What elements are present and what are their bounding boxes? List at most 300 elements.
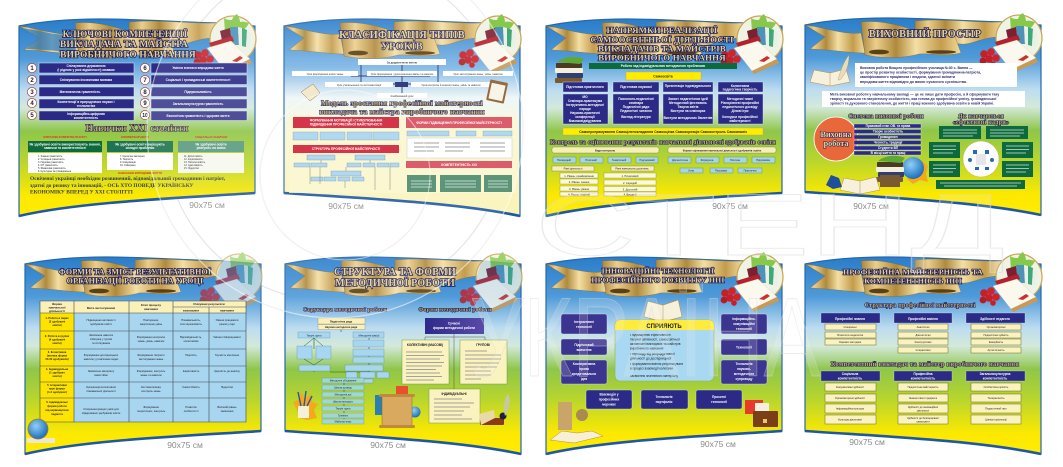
control diagram: Рівні діяльності xyxy=(564,167,583,171)
skills columns: КЛЮЧОВІ КОМПЕТЕНТНОСТІ xyxy=(43,135,87,139)
bottom boxes: мережах xyxy=(602,402,616,406)
table: 20-30 здобувачів) xyxy=(45,357,69,361)
skills columns: навички та компетентності xyxy=(44,146,86,150)
control diagram: Письмова xyxy=(715,168,728,172)
skills columns: 13. Наполегливість xyxy=(184,161,206,164)
table: Відповідальність, xyxy=(180,335,202,339)
table: педагога xyxy=(51,413,63,416)
icon: scroll with school items xyxy=(375,386,420,428)
competency list: Екологічна грамотність і здорове життя xyxy=(167,114,230,118)
left boxes xyxy=(561,314,607,384)
title: НАПРЯМКИ РЕАЛІЗАЦІЇ xyxy=(607,25,718,35)
lower columns: Педагогічний такт xyxy=(985,406,1008,410)
control diagram: Поточний xyxy=(585,158,597,162)
flow chart xyxy=(292,59,513,98)
subheading right: Як навчаються xyxy=(958,114,1004,120)
panel 5: forms of lesson organisation xyxy=(25,252,262,454)
green text boxes xyxy=(929,126,1033,189)
table: Етап процесу xyxy=(141,303,161,307)
four columns: Виступи на семінарах xyxy=(671,109,706,113)
navy list: Громадянин xyxy=(878,135,898,139)
centre box: діяльності до дослідницької xyxy=(630,356,671,360)
skills columns: 12. Ініціативність xyxy=(184,158,204,161)
forms tree xyxy=(402,318,507,423)
table: (1-2 здобувачі) xyxy=(47,390,67,394)
left boxes: ідея xyxy=(581,377,587,381)
table: виховання xyxy=(183,308,199,312)
skills columns: реагують на зміни xyxy=(197,146,225,150)
green bar xyxy=(589,63,737,69)
structure tree: Науково-методична рада xyxy=(325,325,358,329)
bottom boxes: портфоліо xyxy=(656,400,672,404)
model diagram: ФОРМИ ПІДВИЩЕННЯ ПРОФЕСІЙНОЇ МАЙСТЕРНОСТІ xyxy=(416,121,502,125)
lower columns: Особистісна зрілість xyxy=(984,385,1009,389)
text box 2: зрілості та духовного становлення, до життя і праці кожного здобувача освіти в новій Україні. xyxy=(830,102,994,106)
table: Творчість xyxy=(185,353,198,357)
navy list: Студенти ВП xyxy=(878,146,899,150)
title: ВИКЛАДАЧА ТА МАЙСТРА xyxy=(60,38,188,50)
table: (2 здобувачі xyxy=(49,320,65,324)
model diagram xyxy=(289,116,516,193)
table: застосування знань xyxy=(139,358,164,361)
forms tree: форми методичної роботи xyxy=(433,326,475,330)
lower columns: Знання свого предмета xyxy=(909,396,938,400)
four columns: педагогічна творчість xyxy=(723,88,757,92)
left boxes: кредитовальна xyxy=(572,372,596,376)
competency list: Компетенції в природничих науках і xyxy=(57,100,115,104)
size labels: 90х75 см xyxy=(328,201,364,211)
title: КЛЮЧОВІ КОМПЕТЕНЦІЇ xyxy=(63,27,188,40)
flow chart: Урок узагальнення та систематизації xyxy=(337,83,381,87)
control diagram: Діагностична xyxy=(672,158,688,162)
table: 3. Колективна xyxy=(48,350,67,354)
table: 6. Індивідуальні xyxy=(46,400,68,404)
panel 4: educational space xyxy=(805,13,1042,215)
text box 1: впродовж життя відповідно до вимог сучасного суспільства. xyxy=(860,80,967,84)
four columns: Виступи методичних бюлетнів xyxy=(664,116,712,120)
skills columns: складні проблеми xyxy=(126,146,154,150)
table: Високий рівень xyxy=(218,405,237,409)
competency list: 7 xyxy=(143,78,147,84)
left boxes: Інтерактивні xyxy=(574,320,594,324)
centre box: творчої активності, самоосвітньої xyxy=(630,338,680,342)
table: Систематизація, xyxy=(141,385,162,389)
competency list: 2 xyxy=(30,78,34,84)
orange circle: Виховна xyxy=(820,130,852,139)
text box 1: Виховна робота Вищого професійного училища №30 с. Вапна — xyxy=(860,66,973,70)
structure tree: Творчі групи xyxy=(307,334,322,338)
table: самостійно xyxy=(94,373,108,377)
competency list: 3 xyxy=(30,90,34,96)
left boxes: вивчення xyxy=(576,348,592,352)
icon: globe on book xyxy=(27,419,55,443)
skills columns: Як здобувачі освіти вирішують xyxy=(115,142,165,146)
orange circle xyxy=(814,117,858,161)
table xyxy=(40,301,246,422)
icon: book stack xyxy=(555,57,584,83)
table: разом у парі xyxy=(219,322,235,326)
centre box: СПРИЯЮТЬ xyxy=(646,324,682,330)
table: (велика форма xyxy=(47,354,67,358)
subheading: competent teacher: Компетентний викладач та майстер виробничого навчання xyxy=(831,361,1019,368)
table: особистості xyxy=(184,409,199,413)
four columns: Підготовка наукової xyxy=(620,85,652,89)
skills columns: 8. Творчість xyxy=(120,158,134,161)
skills columns: НАВЧАННЯ ВПРОДОВЖ ЖИТТЯ xyxy=(118,171,162,175)
table: навичок у розв'язанні задач xyxy=(84,357,119,361)
structure tree: Тренінги xyxy=(338,414,349,418)
bottom boxes: Взаємодія у xyxy=(599,392,619,396)
right boxes: методичного xyxy=(734,372,754,376)
table: спостережливість xyxy=(180,322,203,326)
left boxes: Кооперативна xyxy=(573,362,595,366)
table: Формування творчого xyxy=(137,353,165,357)
upper columns: Психолого-педагогічні xyxy=(837,333,864,337)
skills columns: КОМПЕТЕНТНОСТІ xyxy=(121,135,149,139)
title: ПРОФЕСІЙНОГО РОЗВИТКУ ППІ xyxy=(591,276,725,284)
skills columns xyxy=(28,135,244,175)
skills columns: 3. Наукова грамотність xyxy=(38,161,64,164)
icon: globe and books xyxy=(826,156,928,194)
skills columns: 4. ІКТ грамотність xyxy=(38,164,59,167)
icon: book with quill xyxy=(810,55,850,86)
competency list: 8 xyxy=(143,90,147,96)
bottom boxes: Технологія xyxy=(655,395,673,399)
lower columns: Професійна xyxy=(914,372,933,376)
centre box: виробничого навчання xyxy=(630,346,664,350)
table: та спілкування xyxy=(92,341,111,345)
bottom boxes xyxy=(586,390,742,409)
competency list: 6 xyxy=(143,66,147,72)
table: малі форми xyxy=(49,386,65,390)
icon: briefcase xyxy=(745,400,778,427)
structure tree: Методичні комісії xyxy=(359,334,380,338)
orange circle: робота xyxy=(824,139,848,148)
four columns: Колективна xyxy=(731,84,749,88)
four columns: Методичний фестиваль xyxy=(669,101,707,105)
size labels: 90х75 см xyxy=(370,440,406,450)
right boxes: Технологія xyxy=(735,362,753,366)
table: знань, умінь, навичок xyxy=(138,339,165,343)
table: (1 здобувач xyxy=(49,370,65,374)
size labels: 90х75 см xyxy=(700,439,736,449)
control diagram: 1. Початковий xyxy=(622,174,639,178)
structure tree: Творчі групи xyxy=(336,407,351,411)
right boxes xyxy=(721,314,767,384)
text box 2 xyxy=(822,91,1025,107)
control diagram: 4. Рівень: творчий xyxy=(568,192,590,196)
upper columns: Аналітичні xyxy=(917,325,930,329)
four columns: Захист педагогічних ідей xyxy=(668,97,708,101)
structure tree xyxy=(297,318,389,424)
upper columns: Педагогічна чуйність xyxy=(984,333,1009,337)
table: Формування, контроль xyxy=(137,369,166,373)
four columns: Презентація індивідуального xyxy=(665,84,711,88)
competency list: 9 xyxy=(143,101,147,107)
lower columns: компетентність xyxy=(838,376,862,380)
panel 6: methodical work xyxy=(285,252,522,454)
four columns: Педагогічні ради xyxy=(623,105,649,109)
flow chart: Комбінований урок xyxy=(391,94,414,98)
table: Мета застосування xyxy=(87,306,115,310)
skills columns: 10. Співпраця xyxy=(120,164,136,167)
skills columns: 2. Читацька грамотність xyxy=(38,158,65,161)
competency list: Підприємливість xyxy=(184,90,212,94)
table: Формування контролю xyxy=(137,335,165,339)
panel 7: innovation technologies xyxy=(546,252,783,454)
table: Уміння співпрацювати xyxy=(213,335,241,339)
upper columns: Інтерактивні xyxy=(916,348,931,352)
competency list: технологіях xyxy=(77,104,96,108)
competency list: Соціальні і громадянські компетентності xyxy=(166,78,231,82)
table: Гнучкість мислення xyxy=(215,353,240,357)
size labels: 90х75 см xyxy=(849,437,885,447)
four columns: Підготовка практичного xyxy=(566,85,604,89)
right boxes: Інформаційно- xyxy=(732,317,756,321)
four columns: Різнорівневі професійні xyxy=(721,101,759,105)
four columns: Науково-практичні xyxy=(570,111,600,115)
icon: pencils in a cup xyxy=(293,391,318,420)
table: освіти) xyxy=(52,323,62,327)
self-development bar: Самопрограмування Самоцілепокладання Самооцінка Самокорекція Самоконтроль Самоаналіз xyxy=(579,130,747,134)
control diagram: 4. Високий xyxy=(624,192,637,196)
navy list: В місці життя та праці xyxy=(871,151,905,155)
title: МЕТОДИЧНОЇ РОБОТИ xyxy=(335,276,455,289)
subheading: Контроль та оцінювання результатів навчальної діяльності здобувачів освіти xyxy=(550,139,776,146)
self-development bar xyxy=(563,128,763,135)
yellow label: Самоосвіта xyxy=(653,74,673,78)
centre box: активності викладачів та майстрів xyxy=(630,342,681,346)
table: Організація колективної xyxy=(86,385,116,389)
flow chart: Урок формування і удосконалення вмінь та навичок xyxy=(371,72,434,76)
control diagram: Попередній xyxy=(557,158,572,162)
structure tree: Методичні об'єднання xyxy=(330,379,357,383)
control diagram: Рівні навчальних досягнень xyxy=(615,167,649,171)
control diagram: 3. Достатній xyxy=(623,187,638,191)
lower columns: Здібності до інноваційної xyxy=(908,405,938,409)
table: Створення кращих умов для xyxy=(83,407,119,411)
lower columns: Організаторські здібності xyxy=(835,396,865,400)
lower columns: Культура діалогової xyxy=(838,418,862,422)
control diagram: Формуюча xyxy=(701,158,714,162)
right boxes: технології xyxy=(736,327,752,331)
subheading: Модель зростання професійної майстерності xyxy=(321,98,483,108)
table: Засвоєння навичок xyxy=(89,333,114,337)
text box 1 xyxy=(855,63,1017,87)
competency list: Загальнокультурна грамотність xyxy=(173,102,223,106)
control diagram: Види контролю xyxy=(595,148,616,152)
table: контроль знань xyxy=(141,390,161,393)
table: пізнавальної діяльності xyxy=(86,389,116,393)
control diagram: Практична xyxy=(744,168,757,172)
competency list: (і рідною у разі відмінності) мовами xyxy=(57,68,115,72)
table: навчальної xyxy=(49,306,66,310)
four columns: наради xyxy=(579,107,591,111)
subheading left: Структура методичної роботи xyxy=(303,306,387,313)
table: 2. Робота в групах xyxy=(45,334,70,338)
table: Засвоєння матеріалу xyxy=(88,369,115,373)
table: 1. Робота в парах xyxy=(45,316,69,320)
structure tree: Школа досвіду xyxy=(334,386,353,390)
size labels: 90х75 см xyxy=(167,440,203,450)
watermark: background rings xyxy=(147,0,523,318)
table: Самостійність xyxy=(182,385,200,389)
structure tree: Педагогічна рада xyxy=(330,320,353,324)
flow chart: Урок застосування знань, умінь і навичок xyxy=(453,72,504,76)
lower columns: Ціннісні орієнтації xyxy=(985,418,1007,422)
control diagram: Поточна xyxy=(730,158,741,162)
table: 5. Інтерактивні xyxy=(47,383,67,387)
text box 1: кваліфікованого працівника і людини, здатної змінити xyxy=(860,75,955,79)
four columns: Методичні тижні xyxy=(727,97,753,101)
four columns: МО xyxy=(582,95,588,99)
lower columns: Комунікативні здібності xyxy=(836,385,864,389)
lower columns: Толерантність xyxy=(987,396,1005,400)
competency list: 4 xyxy=(30,101,34,107)
table: Повторення, xyxy=(143,318,159,322)
competency list: компетентність xyxy=(74,116,98,120)
watermark: translucent logo over the stands: СТЕНД xyxy=(535,175,1005,274)
heading: skills: Навички XXI століття xyxy=(86,123,188,134)
skills columns: 6. Культурна та громадянська xyxy=(38,170,72,173)
competency list: Уміння вчитися впродовж життя xyxy=(172,66,224,70)
skills columns: 9. Комунікація xyxy=(120,161,136,164)
skills columns: 5. Фінансова грамотність xyxy=(38,167,66,170)
title: УРОКІВ xyxy=(381,42,423,52)
upper columns: Спеціальні xyxy=(843,325,857,329)
icon: clipboard xyxy=(486,79,508,104)
subheading right: Форми методичної роботи xyxy=(418,306,492,313)
title: ПРОФЕСІЙНА МАЙСТЕРНІСТЬ ТА xyxy=(843,268,983,276)
table: 4. Індивідуальна xyxy=(46,367,69,371)
table: освіти) xyxy=(52,341,62,345)
table: Розвиток xyxy=(185,405,197,409)
table: Лідерство xyxy=(221,385,234,389)
competency list: Інформаційно-цифрова xyxy=(67,112,105,116)
text box 2: Мета виховної роботи у навчальному закладі — це не лише дати професію, а й сформувати таку xyxy=(830,92,999,96)
four columns: педагогічного досвіду xyxy=(722,105,758,109)
size labels xyxy=(167,200,889,450)
lower columns: Здібності до безперервної xyxy=(907,416,939,420)
watermark: translucent logo over the stands xyxy=(147,0,1005,400)
table: знань та навичок xyxy=(140,374,162,377)
competency list: Спілкування іноземними мовами xyxy=(60,78,112,82)
upper columns: Артистичність xyxy=(988,348,1005,352)
control diagram: Підсумковий xyxy=(639,158,655,162)
subheading left: Система виховної роботи xyxy=(848,113,924,120)
subheading: викладача та майстра виробничого навчання xyxy=(319,107,485,116)
structure tree: Методичні дні xyxy=(335,393,352,397)
model diagram: КОМПЕТЕНТНІСТЬ XXI xyxy=(441,163,477,167)
right boxes: супроводу xyxy=(735,377,753,381)
control diagram: Усна xyxy=(688,168,694,172)
forms tree: Сучасні xyxy=(448,322,460,326)
control diagram: 2. Рівень: знання xyxy=(569,180,590,184)
table: Формування дослідницьких xyxy=(84,353,119,357)
yellow label xyxy=(626,72,701,80)
icons circle xyxy=(963,141,999,177)
panel 2: lesson types xyxy=(284,14,521,216)
skills columns: 11. Допитливість xyxy=(184,155,203,158)
table: теоретичних, контроль xyxy=(137,410,166,413)
size labels: 90х75 см xyxy=(712,201,748,211)
title: ВИРОБНИЧОГО НАВЧАННЯ xyxy=(598,52,726,62)
left boxes: технології xyxy=(576,325,592,329)
lower columns: Педагогічна майстерність xyxy=(908,385,939,389)
bottom boxes: професійних xyxy=(599,398,620,402)
four columns: майстерності xyxy=(729,119,751,123)
right boxes: комунікаційні xyxy=(733,322,755,326)
right boxes: Технології xyxy=(736,346,752,350)
flow chart: За дидактичною метою xyxy=(387,60,418,64)
lower columns: Інформаційна культура xyxy=(836,406,865,410)
structure tree: Школа молодого xyxy=(333,400,354,404)
lower columns: Соціальна xyxy=(842,372,858,376)
navy list: Чесність, традиції xyxy=(874,140,902,144)
icon: open book xyxy=(644,300,682,322)
competency list: 10 xyxy=(142,113,148,119)
flow chart: Урок формування нових знань xyxy=(307,72,344,76)
title: КОМПЕТЕНТНІСТЬ ППІ xyxy=(864,276,962,286)
centre box xyxy=(615,320,714,381)
competency list: Математична грамотність xyxy=(60,90,100,94)
centre box: засвоєння знаннєвого матеріалу xyxy=(630,374,679,378)
lower columns: компетентність xyxy=(911,376,935,380)
four columns: конференції xyxy=(575,115,595,119)
four columns: Творча звітів xyxy=(678,105,698,109)
flow chart: Урок контролю й корекції знань, умінь та навичок xyxy=(421,83,481,87)
navy list: Правовий стан ОВ. та права xyxy=(866,124,911,128)
lower columns: компетентність xyxy=(983,376,1007,380)
size labels: 90х75 см xyxy=(853,201,889,211)
upper columns: Професійні вміння xyxy=(908,317,938,321)
four columns: Психолого-педагогічні xyxy=(618,97,654,101)
title: ІННОВАЦІЙНІ ТЕХНОЛОГІЇ xyxy=(602,266,714,276)
control diagram: Форми оцінювання навчальної діяльності здобувачів освіти xyxy=(683,148,762,152)
skills columns: 15. Лідерство xyxy=(184,167,200,170)
control diagram: 2. Середній xyxy=(623,181,638,185)
title: КЛАСИФІКАЦІЯ ТИПІВ xyxy=(339,30,465,41)
structure tree: Майстер-клас xyxy=(335,420,352,424)
icon: quill and scrolls xyxy=(479,394,510,425)
table: засвоєння xyxy=(221,410,234,413)
bottom boxes: Проєктні xyxy=(712,395,726,399)
upper columns: Діагностичні xyxy=(916,333,931,337)
table: співпраці у групах xyxy=(90,337,113,341)
centre box: • підвищенню ефективності xyxy=(630,333,671,337)
four columns: Конкурси професійної xyxy=(722,115,758,119)
table: навчання xyxy=(144,307,158,311)
upper columns: Окремих методики xyxy=(839,340,862,344)
navy list xyxy=(854,124,921,155)
panel 8: professional mastery xyxy=(805,252,1042,454)
centre box: • формування вміння рефлексувати xyxy=(630,362,683,366)
table: під керівництвом xyxy=(45,408,69,412)
lower columns: самоосвіти xyxy=(916,420,930,424)
control diagram: Тематичний xyxy=(612,158,627,162)
upper columns: Конструктивні xyxy=(915,340,932,344)
text box 2: творчу, морально та патріотичну особистість, яка готова до професійної успіху, громадянської xyxy=(830,97,997,101)
control diagram: 3. Рівень: уміння xyxy=(569,187,590,191)
forms tree: КОЛЕКТИВНІ (МАСОВІ) xyxy=(407,343,443,347)
control diagram: Підсумкова xyxy=(756,158,770,162)
closing statement: Освіченої українці необхідно розвинений, відповідальний громадянин і патріот, xyxy=(30,175,226,182)
upper columns: Організаторські xyxy=(987,325,1006,329)
table: діяльності xyxy=(49,309,65,313)
icon: book and magnifier xyxy=(550,402,603,443)
table: Уміння працювати xyxy=(216,318,239,322)
four columns: Педагогічні читання xyxy=(620,109,652,113)
